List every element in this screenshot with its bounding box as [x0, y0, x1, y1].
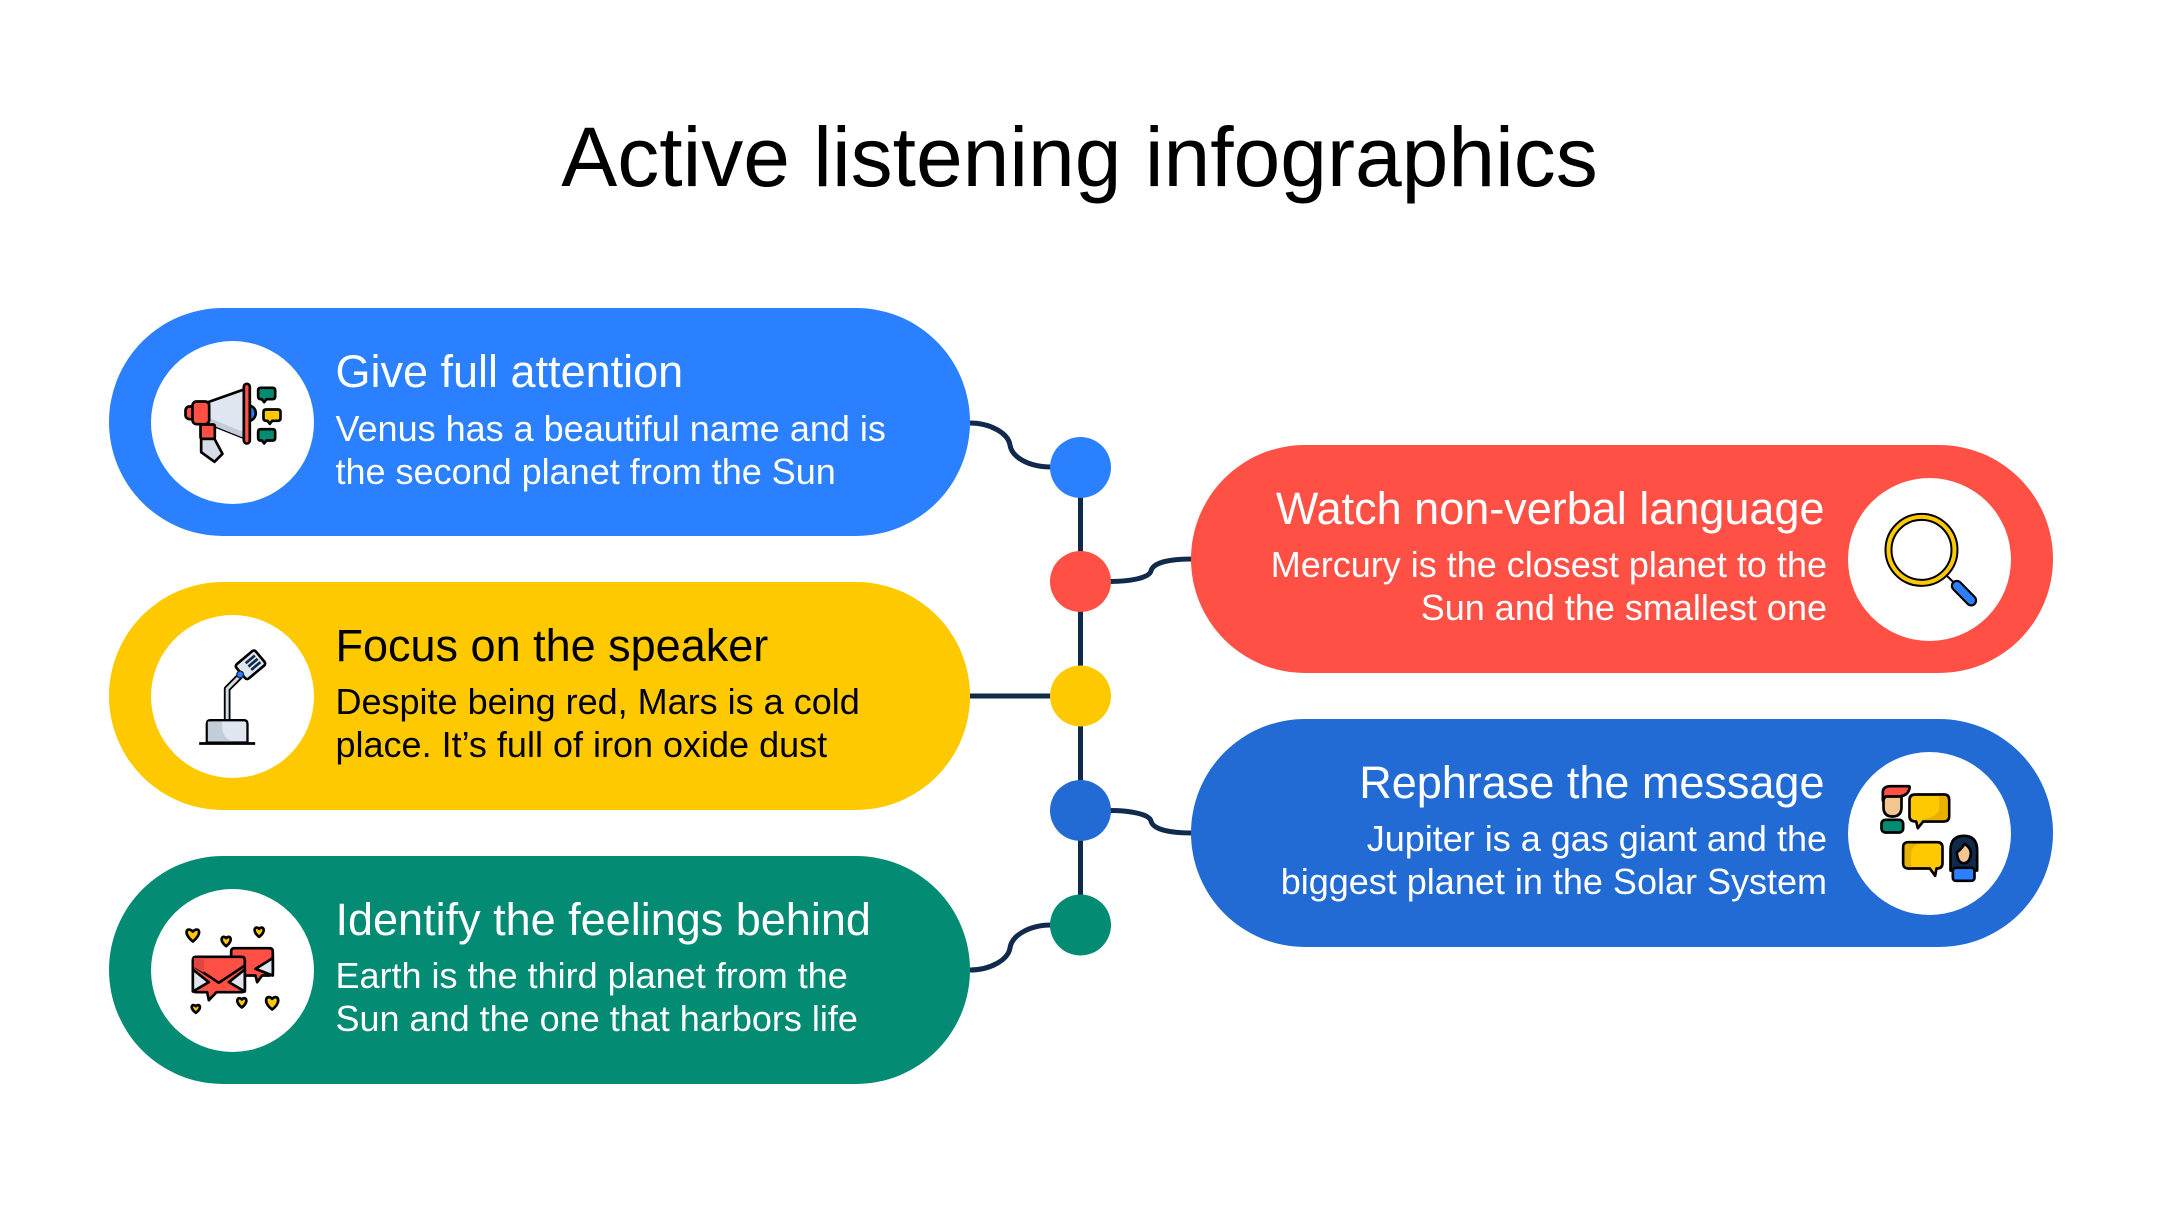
heading: Watch non-verbal language	[1276, 483, 1824, 534]
node: green	[1050, 894, 1111, 956]
heading: Give full attention	[336, 346, 683, 397]
body text	[336, 681, 860, 765]
body text: Earth is the third planet from the	[336, 955, 848, 996]
body text: Sun and the smallest one	[1421, 587, 1827, 628]
title: Active listening infographics	[561, 110, 1598, 204]
body text: the second planet from the Sun	[336, 451, 836, 492]
body text	[1271, 544, 1827, 628]
panel: identify the feelings behind	[109, 856, 970, 1084]
connector: give full attention	[970, 423, 1051, 467]
panel: focus on the speaker	[109, 582, 970, 810]
panel: give full attention	[109, 308, 970, 536]
connector: watch non-verbal language	[1110, 559, 1192, 582]
body text: Mercury is the closest planet to the	[1271, 544, 1827, 585]
connector: rephrase the message	[1110, 810, 1192, 833]
heading: Focus on the speaker	[336, 620, 768, 671]
body text	[1281, 818, 1827, 902]
connector: focus on the speaker	[970, 694, 1051, 698]
connector: identify the feelings	[970, 925, 1051, 970]
body text	[336, 408, 886, 492]
body text: biggest planet in the Solar System	[1281, 861, 1827, 902]
icon: love letters	[150, 888, 314, 1052]
body text	[336, 955, 858, 1039]
node: red	[1050, 551, 1111, 612]
node: yellow	[1050, 666, 1111, 726]
body text: Sun and the one that harbors life	[336, 998, 858, 1039]
panel: watch non-verbal language	[1191, 445, 2053, 673]
node: blue	[1050, 437, 1111, 498]
icon: megaphone	[150, 340, 314, 504]
heading: Rephrase the message	[1359, 757, 1824, 808]
body text: place. It’s full of iron oxide dust	[336, 724, 827, 765]
icon: microphone	[150, 614, 314, 778]
node: royal blue	[1050, 780, 1111, 841]
body text: Venus has a beautiful name and is	[336, 408, 886, 449]
body text: Despite being red, Mars is a cold	[336, 681, 860, 722]
vertical spine	[1078, 467, 1083, 925]
body text: Jupiter is a gas giant and the	[1367, 818, 1827, 859]
heading: Identify the feelings behind	[336, 894, 871, 945]
panel: rephrase the message	[1191, 719, 2053, 947]
icon: magnifying glass	[1848, 478, 2010, 640]
icon: conversation	[1848, 752, 2010, 914]
